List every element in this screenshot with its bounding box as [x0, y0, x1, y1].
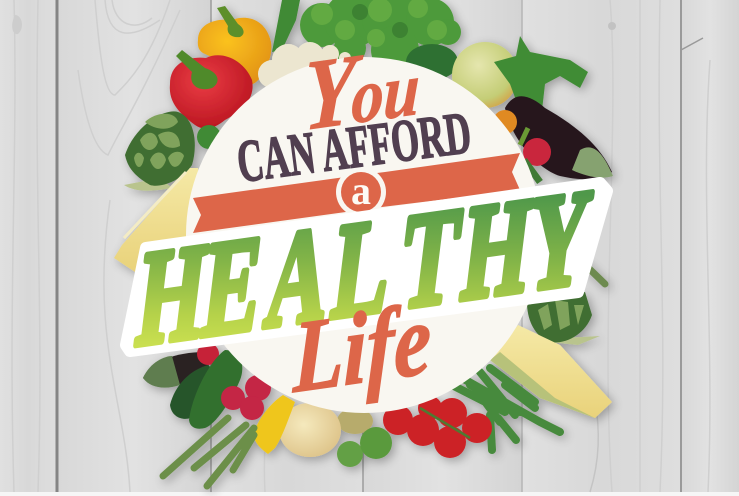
icon: radishes	[221, 375, 271, 420]
heading: Healthy: HEALTHY	[130, 160, 598, 375]
vegetables ring	[114, 0, 613, 486]
icon: cauliflower	[258, 42, 351, 90]
icon: brussels sprout	[197, 125, 221, 149]
heading: You: You	[302, 25, 422, 153]
icon: potato	[279, 403, 341, 457]
icon: artichoke right	[527, 292, 600, 345]
icon: radish top	[197, 343, 219, 365]
icon: eggplant tail	[143, 352, 210, 386]
icon: cucumbers	[170, 350, 242, 429]
icon: artichoke left	[124, 111, 195, 191]
red ribbon	[193, 153, 520, 233]
icon: kohlrabi	[452, 36, 588, 128]
ribbon letter a	[336, 167, 386, 217]
icon: asparagus right	[576, 256, 605, 284]
heading: Life: Life	[292, 281, 431, 415]
icon: tomatoes	[383, 396, 492, 458]
icon: red pepper	[170, 50, 253, 129]
icon: corn left	[114, 168, 205, 272]
icon: corn right	[490, 325, 612, 418]
icon: green beans	[452, 368, 560, 450]
icon: lettuce and chives	[272, 0, 461, 80]
icon: yellow squash	[254, 395, 295, 454]
icon: brussels sprouts	[337, 408, 392, 467]
main circle badge	[186, 57, 542, 413]
white banner	[126, 183, 607, 351]
ribbon letter a: a	[351, 168, 371, 213]
icon: yellow pepper	[198, 6, 271, 84]
icon: eggplant	[493, 96, 613, 182]
heading: Can Afford: CAN AFFORD	[233, 99, 475, 195]
icon: asparagus left	[163, 418, 254, 486]
